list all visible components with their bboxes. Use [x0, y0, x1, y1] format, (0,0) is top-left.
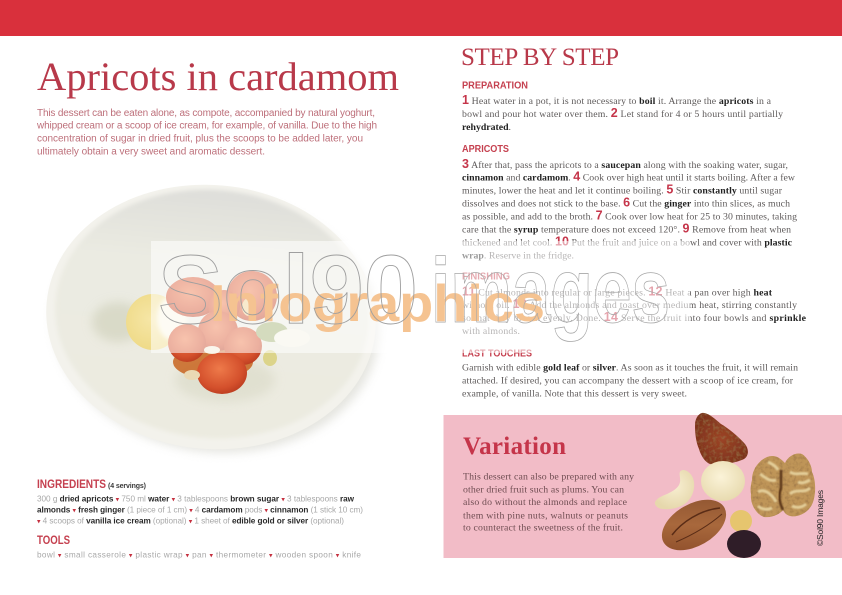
watermark: [151, 235, 690, 353]
section: apricots: dissolves and does not stick to the base. 6 Cut the ginger into thin slices, as much: [462, 196, 790, 210]
section: last touches: example, of vanilla. Note that this dessert is very sweet.: [462, 389, 687, 400]
section: finishing: [462, 270, 807, 337]
section: finishing: 11 Cut almonds into regular or large pieces. 12 Heat a pan over high heat: [462, 285, 773, 299]
photo credit: ©Sol90 Images: [815, 490, 825, 546]
section: finishing: with almonds.: [462, 326, 520, 337]
section: finishing: FINISHING: [462, 270, 510, 282]
section: last touches: [462, 348, 798, 400]
tools list: bowl ▾ small casserole ▾ plastic wrap ▾ pan ▾ thermometer ▾ wooden spoon ▾ knife: [37, 551, 361, 560]
intro text block: ultimately obtain a very sweet and aromatic dessert.: [37, 146, 265, 157]
photo: nuts and dried fruit: [653, 413, 815, 561]
section: apricots: wrap. Reserve in the fridge.: [462, 251, 574, 262]
ingredients heading: (4 servings): [108, 483, 146, 490]
watermark: Infographics: [210, 275, 545, 333]
panel: variation: [444, 413, 842, 561]
ingredients heading: INGREDIENTS: [37, 479, 106, 491]
intro text block: This dessert can be eaten alone, as compote, accompanied by natural yoghurt,: [37, 108, 375, 119]
step by step title: STEP BY STEP: [461, 44, 619, 71]
ingredients list: [37, 495, 363, 526]
variation text: This dessert can also be prepared with any: [463, 472, 634, 483]
section: last touches: LAST TOUCHES: [462, 348, 532, 360]
ingredients list: almonds ▾ fresh ginger (1 piece of 1 cm) ▾ 4 cardamom pods ▾ cinnamon (1 stick 10 cm): [37, 506, 363, 515]
intro text block: whipped cream or a scoop of ice cream, for example, of vanilla. Due to the high: [36, 121, 377, 132]
section: preparation: PREPARATION: [462, 80, 528, 92]
ingredients list: 300 g dried apricots ▾ 750 ml water ▾ 3 tablespoons brown sugar ▾ 3 tablespoons raw: [37, 495, 355, 504]
variation text: [463, 472, 634, 534]
section: apricots: as possible, and add to the broth. 7 Cook over low heat for 25 to 30 minutes, taking: [462, 208, 797, 222]
section: apricots: [462, 143, 797, 262]
variation text: other dried fruit such as plums. You can: [463, 484, 624, 495]
title: Apricots in cardamom: [37, 54, 399, 99]
section: last touches: attached. If desired, you can accompany the dessert with a scoop of ice cream, for: [462, 376, 794, 387]
variation text: also do without the almonds and replace: [463, 497, 628, 508]
section: preparation: bowl and pour hot water over them. 2 Let stand for 4 or 5 hours until partially: [462, 106, 783, 120]
section: preparation: 1 Heat water in a pot, it is not necessary to boil it. Arrange the apricots in a: [462, 93, 772, 107]
section: apricots: thickened and let cool. 10 Put the fruit and juice on a bowl and cover with plastic: [462, 235, 793, 249]
section: finishing: without oil. 13 Add the almonds and toast over medium heat, stirring constantly: [462, 297, 797, 311]
section: finishing: so that they brown evenly. Done. 14 Serve the fruit into four bowls and sprinkle: [462, 310, 807, 324]
section: apricots: 3 After that, pass the apricots to a saucepan along with the soaking water, sugar,: [462, 157, 788, 171]
variation text: to counteract the sweetness of the fruit.: [463, 523, 623, 534]
variation text: them with pine nuts, walnuts or peanuts: [463, 510, 628, 521]
section: apricots: cinnamon and cardamom. 4 Cook over high heat until it starts boiling. After a few: [462, 169, 796, 183]
section: apricots: APRICOTS: [462, 143, 509, 155]
watermark: images: [431, 240, 670, 342]
intro text block: concentration of sugar in dried fruit, plus the scoops to be added later, you: [37, 134, 363, 145]
tools heading: TOOLS: [37, 535, 70, 547]
variation heading: Variation: [463, 433, 566, 460]
section: preparation: [462, 80, 783, 133]
section: apricots: minutes, lower the heat and let it continue boiling. 5 Stir constantly until sugar: [462, 182, 783, 196]
watermark: Sol90: [158, 235, 418, 344]
intro text block: [36, 108, 377, 157]
photo: plate of apricots: [35, 171, 391, 468]
section: last touches: Garnish with edible gold leaf or silver. As soon as it touches the fruit, it will remain: [462, 363, 798, 374]
top red band: [0, 0, 842, 36]
ingredients list: ▾ 4 scoops of vanilla ice cream (optional) ▾ 1 sheet of edible gold or silver (optional): [37, 517, 344, 526]
section: apricots: care that the syrup temperature does not exceed 120°. 9 Remove from heat when: [462, 221, 791, 235]
section: preparation: rehydrated.: [462, 122, 511, 133]
